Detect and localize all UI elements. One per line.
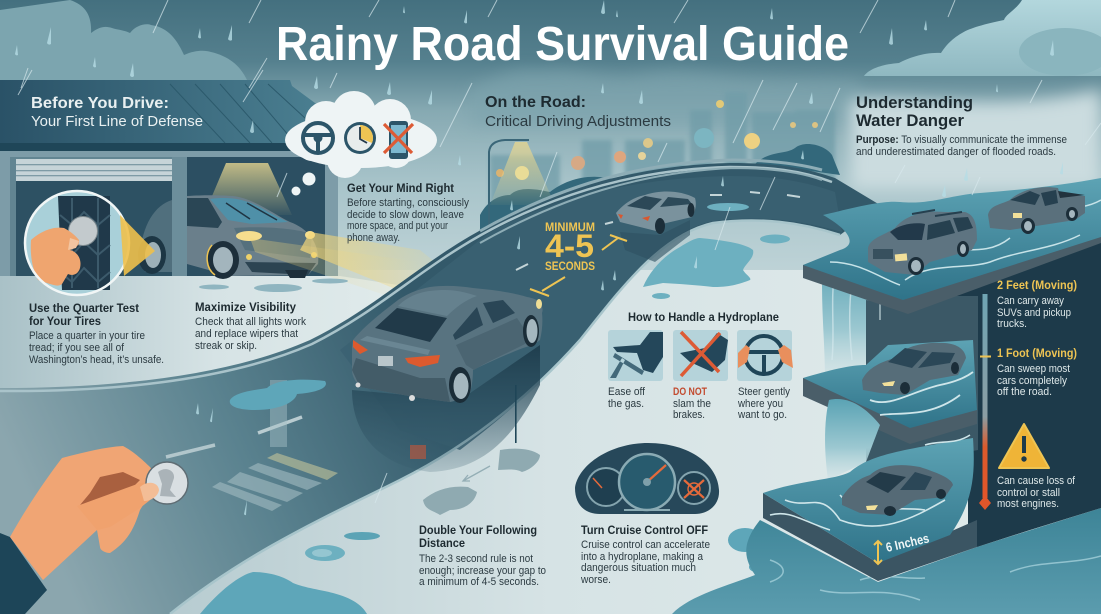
text: cruise control: dangerous situation much — [581, 562, 696, 574]
flood tier 1: SUV and truck — [803, 178, 1101, 314]
trees behind road — [480, 144, 840, 245]
text: hydroplane — [608, 310, 790, 421]
panel: steer gently — [737, 330, 793, 381]
text: following distance: Distance — [419, 536, 465, 550]
thumb — [77, 482, 159, 530]
text: cruise control: into a hydroplane, making a — [581, 551, 704, 563]
text: hydroplane: want to go. — [737, 409, 787, 421]
text: maximize visibility: Maximize Visibility — [195, 300, 296, 314]
dark right panel — [903, 240, 1101, 547]
lower water wave lines — [770, 556, 1101, 600]
street lamp — [489, 140, 555, 232]
garage wall — [0, 151, 338, 279]
hand holding quarter — [0, 446, 188, 614]
puddles bottom — [200, 528, 763, 614]
water — [803, 178, 1101, 300]
garage building — [0, 80, 338, 279]
rear window — [375, 308, 447, 342]
left bay — [10, 157, 172, 279]
text: six inches effect — [997, 475, 1076, 510]
roof — [0, 80, 338, 143]
text: following distance: Double Your Following — [419, 523, 537, 537]
fingers holding quarter — [31, 228, 81, 286]
ceiling lamp cone — [204, 163, 292, 215]
section header: before you drive — [31, 95, 203, 130]
text: 2 feet: 2 Feet (Moving) — [997, 278, 1077, 292]
text: 1 foot — [997, 346, 1077, 398]
panel: do not slam brakes — [673, 330, 728, 381]
thought cloud — [285, 91, 437, 196]
sleeve — [0, 533, 47, 614]
tail lights — [353, 340, 440, 367]
thumb tip — [140, 483, 159, 501]
six inch marker: 6 Inches — [884, 530, 931, 555]
text: 2 feet: Can carry away — [997, 295, 1064, 307]
text: cruise control: Turn Cruise Control OFF — [581, 523, 708, 537]
section header: on the road — [485, 94, 671, 130]
car 2 — [862, 343, 966, 395]
text: quarter test: tread; if you see all of — [29, 342, 125, 354]
text: hydroplane: brakes. — [673, 409, 705, 421]
text: hydroplane: Ease off — [608, 386, 646, 398]
wheels — [449, 367, 471, 403]
section header: on the road: Critical Driving Adjustments — [485, 113, 671, 130]
following distance marker — [530, 235, 627, 296]
road — [0, 163, 880, 614]
text: six inches effect: most engines. — [997, 498, 1059, 510]
text: following distance: enough; increase your gap to — [419, 565, 546, 577]
crosswalk reflection — [212, 453, 338, 511]
car 3 — [842, 465, 953, 515]
blurred city skyline — [490, 92, 835, 235]
body side — [456, 318, 532, 370]
car roof highlight — [398, 290, 477, 316]
callout: minimum seconds: MINIMUM — [545, 220, 595, 234]
road lower edge stripe — [170, 220, 840, 614]
palm — [10, 446, 157, 580]
section header: before you drive: Before You Drive: — [31, 95, 169, 112]
text: get your mind right: Get Your Mind Right — [347, 181, 454, 195]
car in garage — [187, 195, 318, 279]
text: maximize visibility: Check that all lights work — [195, 316, 306, 328]
second car on road — [616, 192, 696, 262]
callout: minimum seconds: SECONDS — [545, 259, 595, 273]
section header: before you drive: Your First Line of Defense — [31, 113, 203, 130]
road edge curve — [0, 167, 832, 391]
road markings — [166, 192, 800, 457]
text: get your mind right: Before starting, consciously — [347, 197, 469, 209]
cloud band right sky — [850, 90, 1101, 190]
text: hydroplane: Steer gently — [738, 386, 790, 398]
text: 2 feet: SUVs and pickup — [997, 307, 1071, 319]
flood tier 2: sedan — [803, 340, 977, 480]
lower water — [672, 508, 1101, 614]
text: quarter test: Use the Quarter Test — [29, 301, 139, 315]
headlight beams — [250, 232, 470, 300]
right bay — [187, 157, 325, 279]
callout: minimum seconds: 4-5 — [545, 228, 594, 264]
text: 1 foot: off the road. — [997, 386, 1052, 398]
text: 1 foot: cars completely — [997, 375, 1067, 387]
road guard rail — [480, 160, 822, 243]
text: get your mind right: decide to slow down, leave — [347, 209, 464, 221]
main car — [352, 286, 543, 403]
text: maximize visibility — [195, 300, 306, 352]
text: hydroplane: the gas. — [608, 398, 644, 410]
finger shadow — [80, 472, 140, 505]
marker line — [515, 385, 517, 443]
text: 2 feet — [997, 278, 1077, 330]
section header: water danger: Understanding — [856, 93, 973, 112]
mid cloud under title — [470, 71, 860, 125]
magnifier pointer — [120, 215, 155, 276]
text: cruise control: Cruise control can accelerate — [581, 539, 710, 551]
section header: water danger: Purpose: To visually communicate the immense — [856, 134, 1067, 146]
car reflection — [352, 345, 540, 472]
section header: on the road: On the Road: — [485, 94, 586, 111]
clouds right — [864, 0, 1101, 76]
trunk — [360, 336, 430, 355]
road puddles far — [305, 203, 790, 561]
tire test magnifier — [25, 191, 129, 295]
road puddle left — [230, 380, 326, 410]
text: hydroplane: slam the — [673, 398, 711, 410]
rear car in left bay — [138, 200, 172, 274]
rain drops — [15, 0, 1063, 515]
text: quarter test: Place a quarter in your tire — [29, 330, 145, 342]
puddles at garage — [199, 278, 348, 292]
far road surface shading — [340, 176, 842, 450]
text: get your mind right: more space, and put your — [347, 220, 448, 232]
text: maximize visibility: streak or skip. — [195, 340, 257, 352]
text: 1 foot: 1 Foot (Moving) — [997, 346, 1077, 360]
warning triangle — [999, 424, 1049, 468]
depth arrow — [979, 294, 991, 510]
SUV — [868, 210, 977, 275]
text: 2 feet: trucks. — [997, 318, 1027, 330]
text: hydroplane: where you — [737, 398, 783, 410]
rear lower — [352, 358, 450, 402]
ground in front of garage — [0, 276, 430, 390]
dashboard — [575, 443, 719, 514]
light reflection on road — [270, 380, 287, 447]
text: following distance — [419, 523, 546, 588]
upper waterfall — [822, 258, 903, 378]
text: cruise control: worse. — [580, 574, 611, 586]
water highlights — [830, 200, 1101, 285]
text: get your mind right: phone away. — [347, 232, 400, 244]
side windows — [453, 300, 515, 340]
middle wall — [866, 296, 978, 470]
text: following distance: The 2-3 second rule is not — [419, 553, 533, 565]
text: maximize visibility: and replace wipers that — [195, 328, 298, 340]
footprint car shadows — [423, 449, 540, 515]
text: following distance: a minimum of 4-5 seconds. — [419, 576, 539, 588]
waterfall 2 — [825, 399, 880, 480]
tail light reflection — [410, 445, 426, 459]
truck — [988, 187, 1085, 234]
fascia — [0, 143, 305, 151]
text: six inches effect: control or stall — [997, 487, 1060, 499]
waterfall streaks — [832, 270, 880, 360]
section header: water danger — [856, 93, 1067, 158]
pillar — [172, 157, 187, 279]
six inch marker — [874, 530, 931, 564]
panel: ease off gas — [608, 330, 663, 381]
section header: water danger: Water Danger — [856, 111, 964, 130]
text: quarter test — [29, 301, 164, 366]
city lights — [496, 100, 818, 177]
text: quarter test: for Your Tires — [29, 314, 101, 328]
text: hydroplane: How to Handle a Hydroplane — [628, 310, 779, 324]
clouds left — [0, 0, 247, 80]
phone crossed icon — [384, 121, 413, 159]
side — [803, 235, 1101, 314]
text: get your mind right — [347, 181, 469, 244]
flood tier 3: sedan in six inches — [763, 435, 977, 581]
section header: water danger: and underestimated danger of flooded roads. — [856, 146, 1056, 158]
text: six inches effect: Can cause loss of — [997, 475, 1076, 487]
text: hydroplane: DO NOT — [673, 386, 707, 398]
title: Rainy Road Survival Guide — [276, 18, 849, 71]
text: quarter test: Washington’s head, it’s unsafe. — [29, 354, 164, 366]
clock icon — [344, 122, 376, 154]
text: 1 foot: Can sweep most — [997, 363, 1070, 375]
quarter — [68, 216, 98, 246]
text: cruise control — [580, 523, 710, 586]
steering wheel icon — [303, 123, 333, 153]
quarter — [146, 462, 188, 504]
roof seams — [170, 84, 318, 143]
callout: minimum seconds — [545, 220, 595, 273]
hydroplane step icons — [608, 330, 793, 381]
